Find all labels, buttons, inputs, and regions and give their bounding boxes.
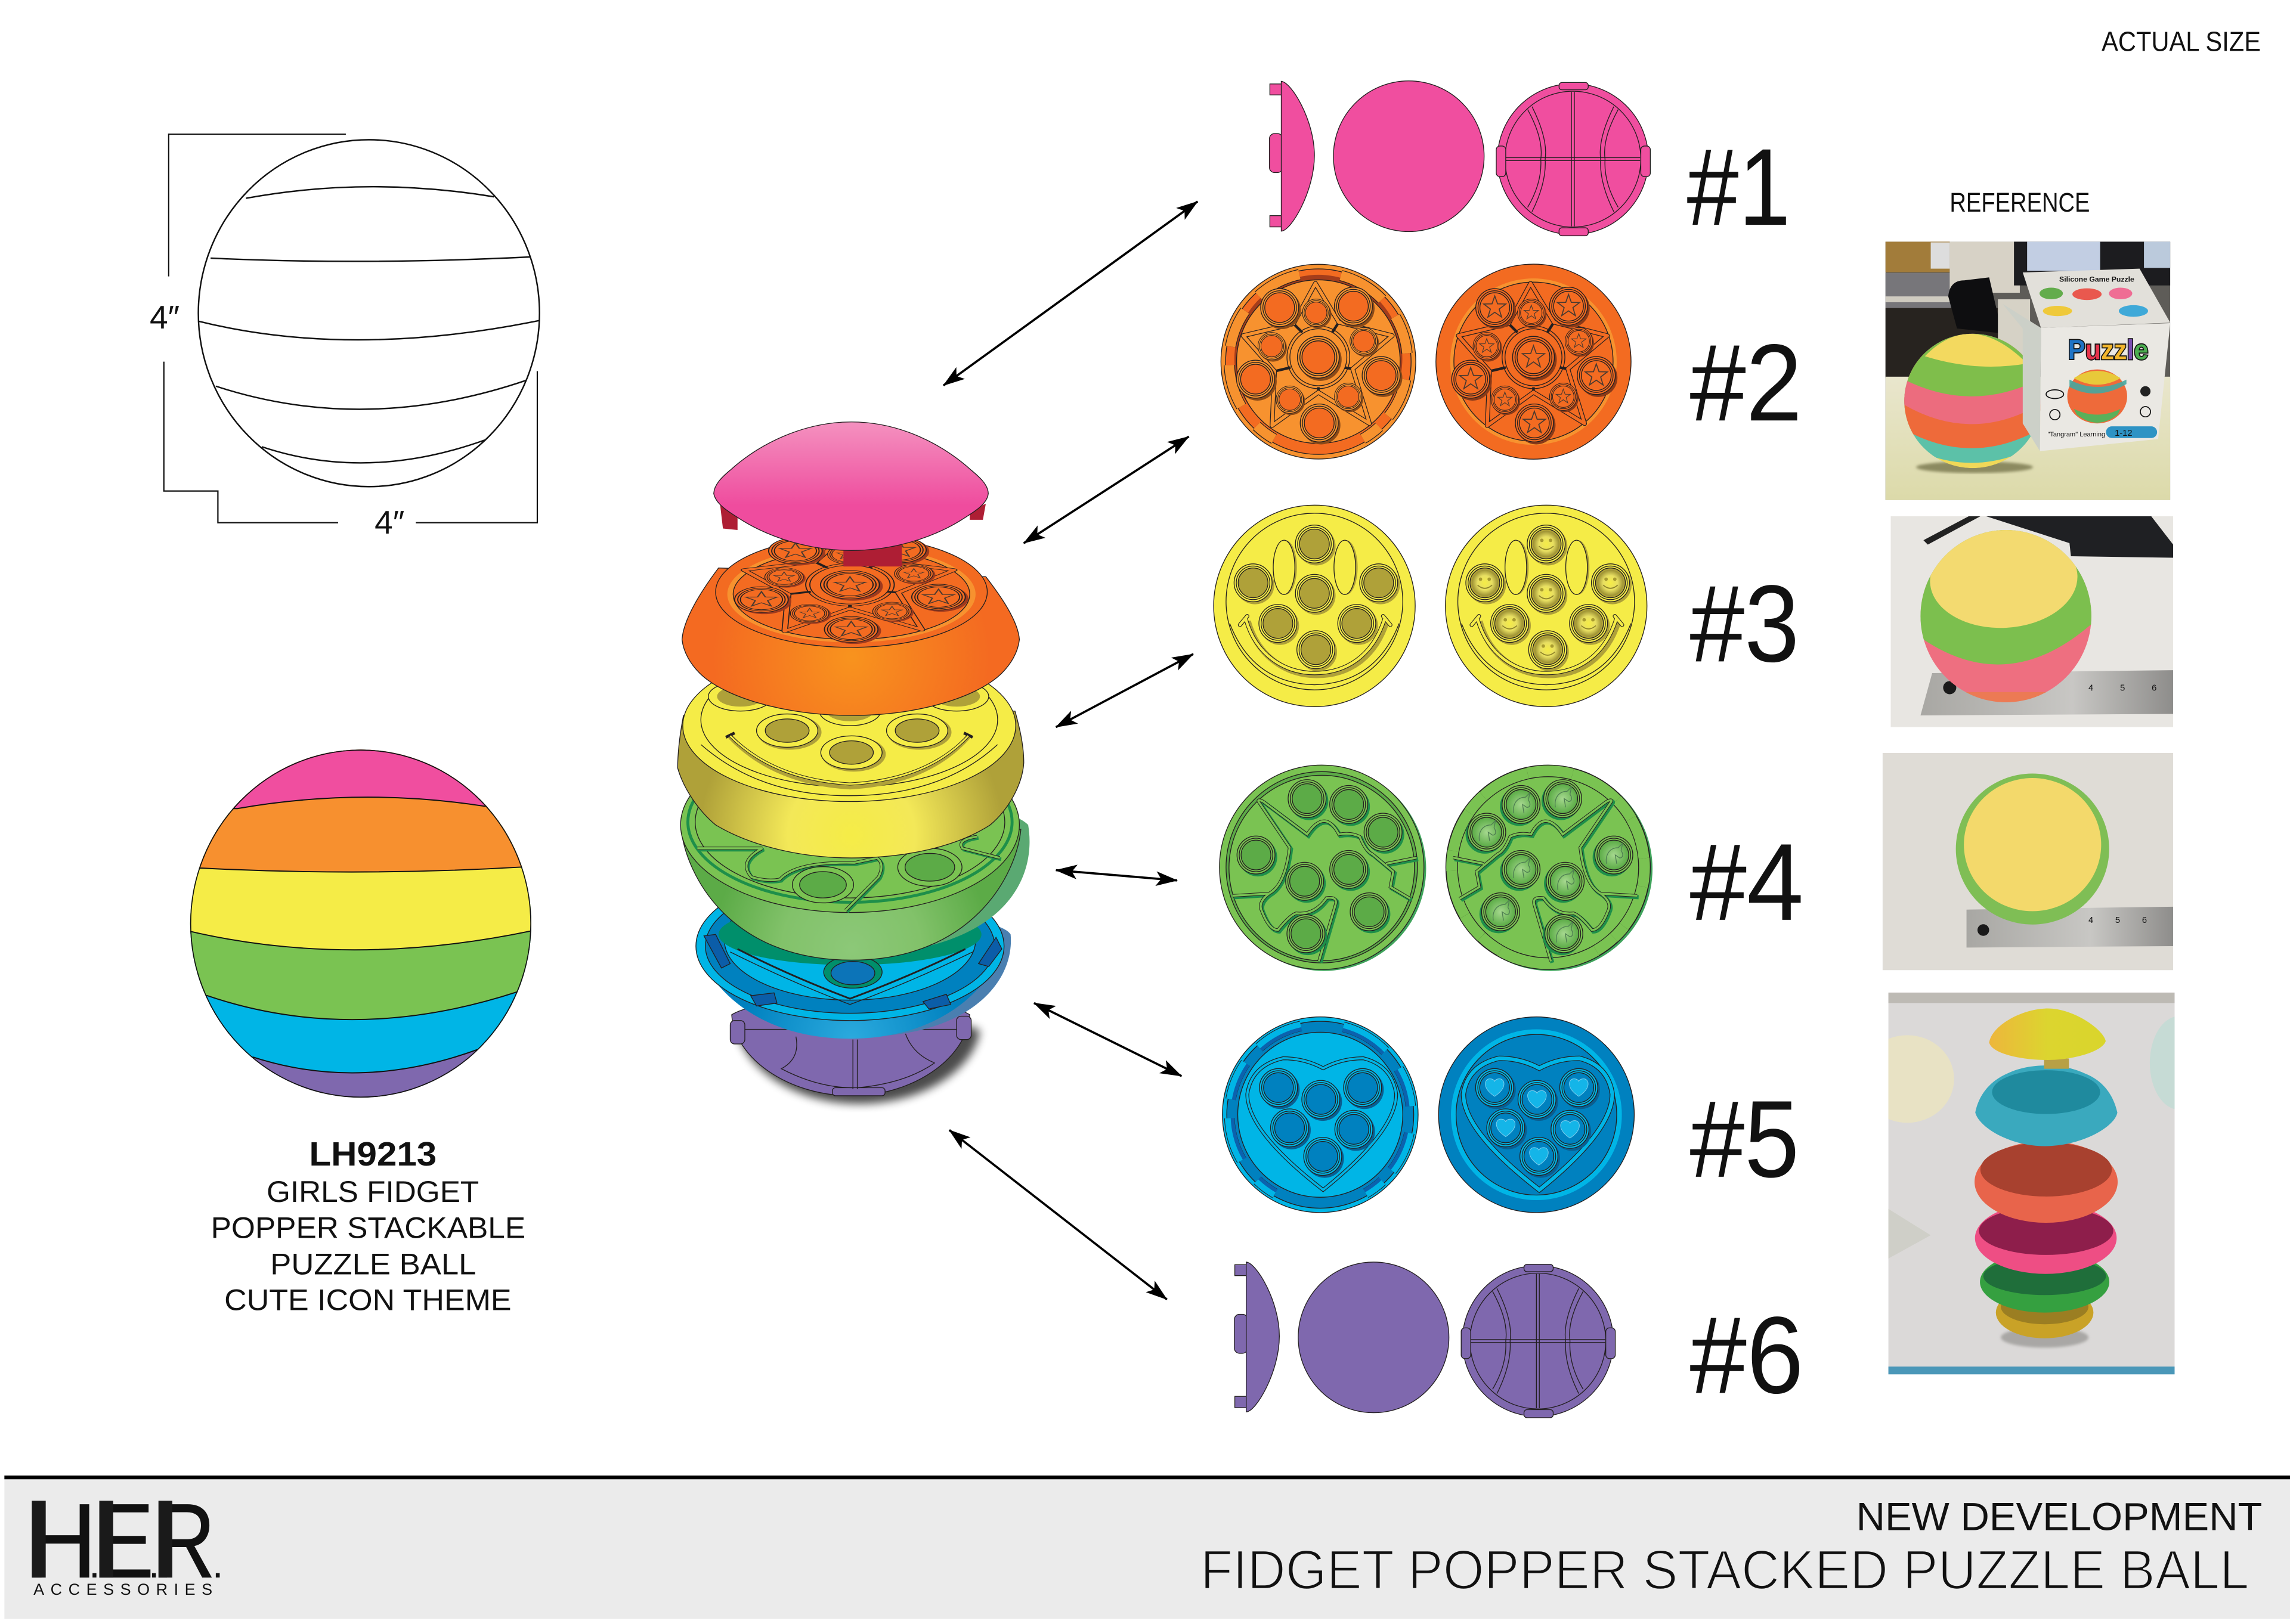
layer 4: green popper: [680, 737, 1029, 960]
part 2: orange front view: [1436, 264, 1631, 459]
product description: PUZZLE BALL: [270, 1247, 476, 1281]
logo: H.E.R. accessories: H: [24, 1481, 98, 1600]
logo: H.E.R. accessories: .: [212, 1541, 224, 1586]
exploded stack illustration: [677, 422, 1029, 1104]
logo: H.E.R. accessories: .: [89, 1541, 100, 1586]
part 1: pink views: [1270, 81, 1650, 236]
part 3: yellow back view: [1214, 505, 1415, 706]
part 5: blue back view: [1212, 1007, 1428, 1223]
part 4: green back view: [1220, 765, 1426, 971]
photo 1: ball beside box: Silicone Game Puzzle: [2059, 275, 2134, 284]
part 4: green unicorn view: [1434, 753, 1662, 981]
photo 2: ball with ruler: [1890, 516, 2173, 727]
logo: H.E.R. accessories: .: [148, 1541, 160, 1586]
part 2: orange back view: [1213, 256, 1424, 467]
number 3: #3: [1689, 562, 1799, 684]
product description: [211, 1135, 525, 1316]
photo 1: ball beside box: "Tangram" Learning Set: [2047, 431, 2117, 438]
footer heading: NEW DEVELOPMENT: [1856, 1495, 2262, 1539]
layer 5: blue popper: [696, 872, 1011, 1039]
logo: H.E.R. accessories: E: [92, 1481, 154, 1600]
photo 1: ball beside box: 1-12: [2115, 429, 2133, 438]
layer 6: purple base: [730, 998, 980, 1104]
number 5: #5: [1689, 1078, 1799, 1200]
photo 4: box art of exploded stack: [1888, 992, 2174, 1375]
outline ball with dimensions: [150, 134, 540, 541]
photo 3: ball from above: [1883, 753, 2173, 970]
layer 3: yellow popper: [677, 650, 1024, 858]
number 4: #4: [1689, 821, 1803, 943]
logo: H.E.R. accessories: ACCESSORIES: [33, 1580, 212, 1598]
number 6: #6: [1689, 1294, 1803, 1416]
footer title: FIDGET POPPER STACKED PUZZLE BALL: [1200, 1539, 2249, 1601]
photo 3: ball from above: 4 5 6: [2088, 916, 2147, 925]
outline ball with dimensions: 4″: [150, 299, 180, 336]
number 2: #2: [1689, 321, 1802, 444]
logo: H.E.R. accessories: R: [151, 1481, 216, 1600]
photo 1: ball beside box: [1886, 241, 2170, 501]
part 5: blue heart view: [1438, 1017, 1634, 1213]
logo: H.E.R. accessories: [24, 1481, 224, 1600]
part 3: yellow smiley view: [1446, 505, 1647, 706]
layer 1: pink dome: [714, 422, 988, 566]
photo 1: ball beside box: Puzzle: [2068, 334, 2148, 365]
rainbow colour ball: [190, 749, 531, 1098]
outline ball with dimensions: 4″: [375, 504, 404, 541]
product description: CUTE ICON THEME: [224, 1283, 512, 1316]
part 6: purple views: [1234, 1262, 1616, 1418]
product description: GIRLS FIDGET: [267, 1175, 479, 1208]
label: actual size: ACTUAL SIZE: [2102, 26, 2261, 57]
product description: LH9213: [309, 1135, 437, 1173]
photo 2: ball with ruler: 4 5 6: [2088, 683, 2156, 693]
arrows: [943, 202, 1197, 1300]
product description: POPPER STACKABLE: [211, 1211, 525, 1245]
label: reference: REFERENCE: [1949, 187, 2090, 218]
number 1: #1: [1687, 126, 1790, 248]
footer band: [4, 1476, 2290, 1619]
layer 2: orange popper: [682, 534, 1019, 715]
